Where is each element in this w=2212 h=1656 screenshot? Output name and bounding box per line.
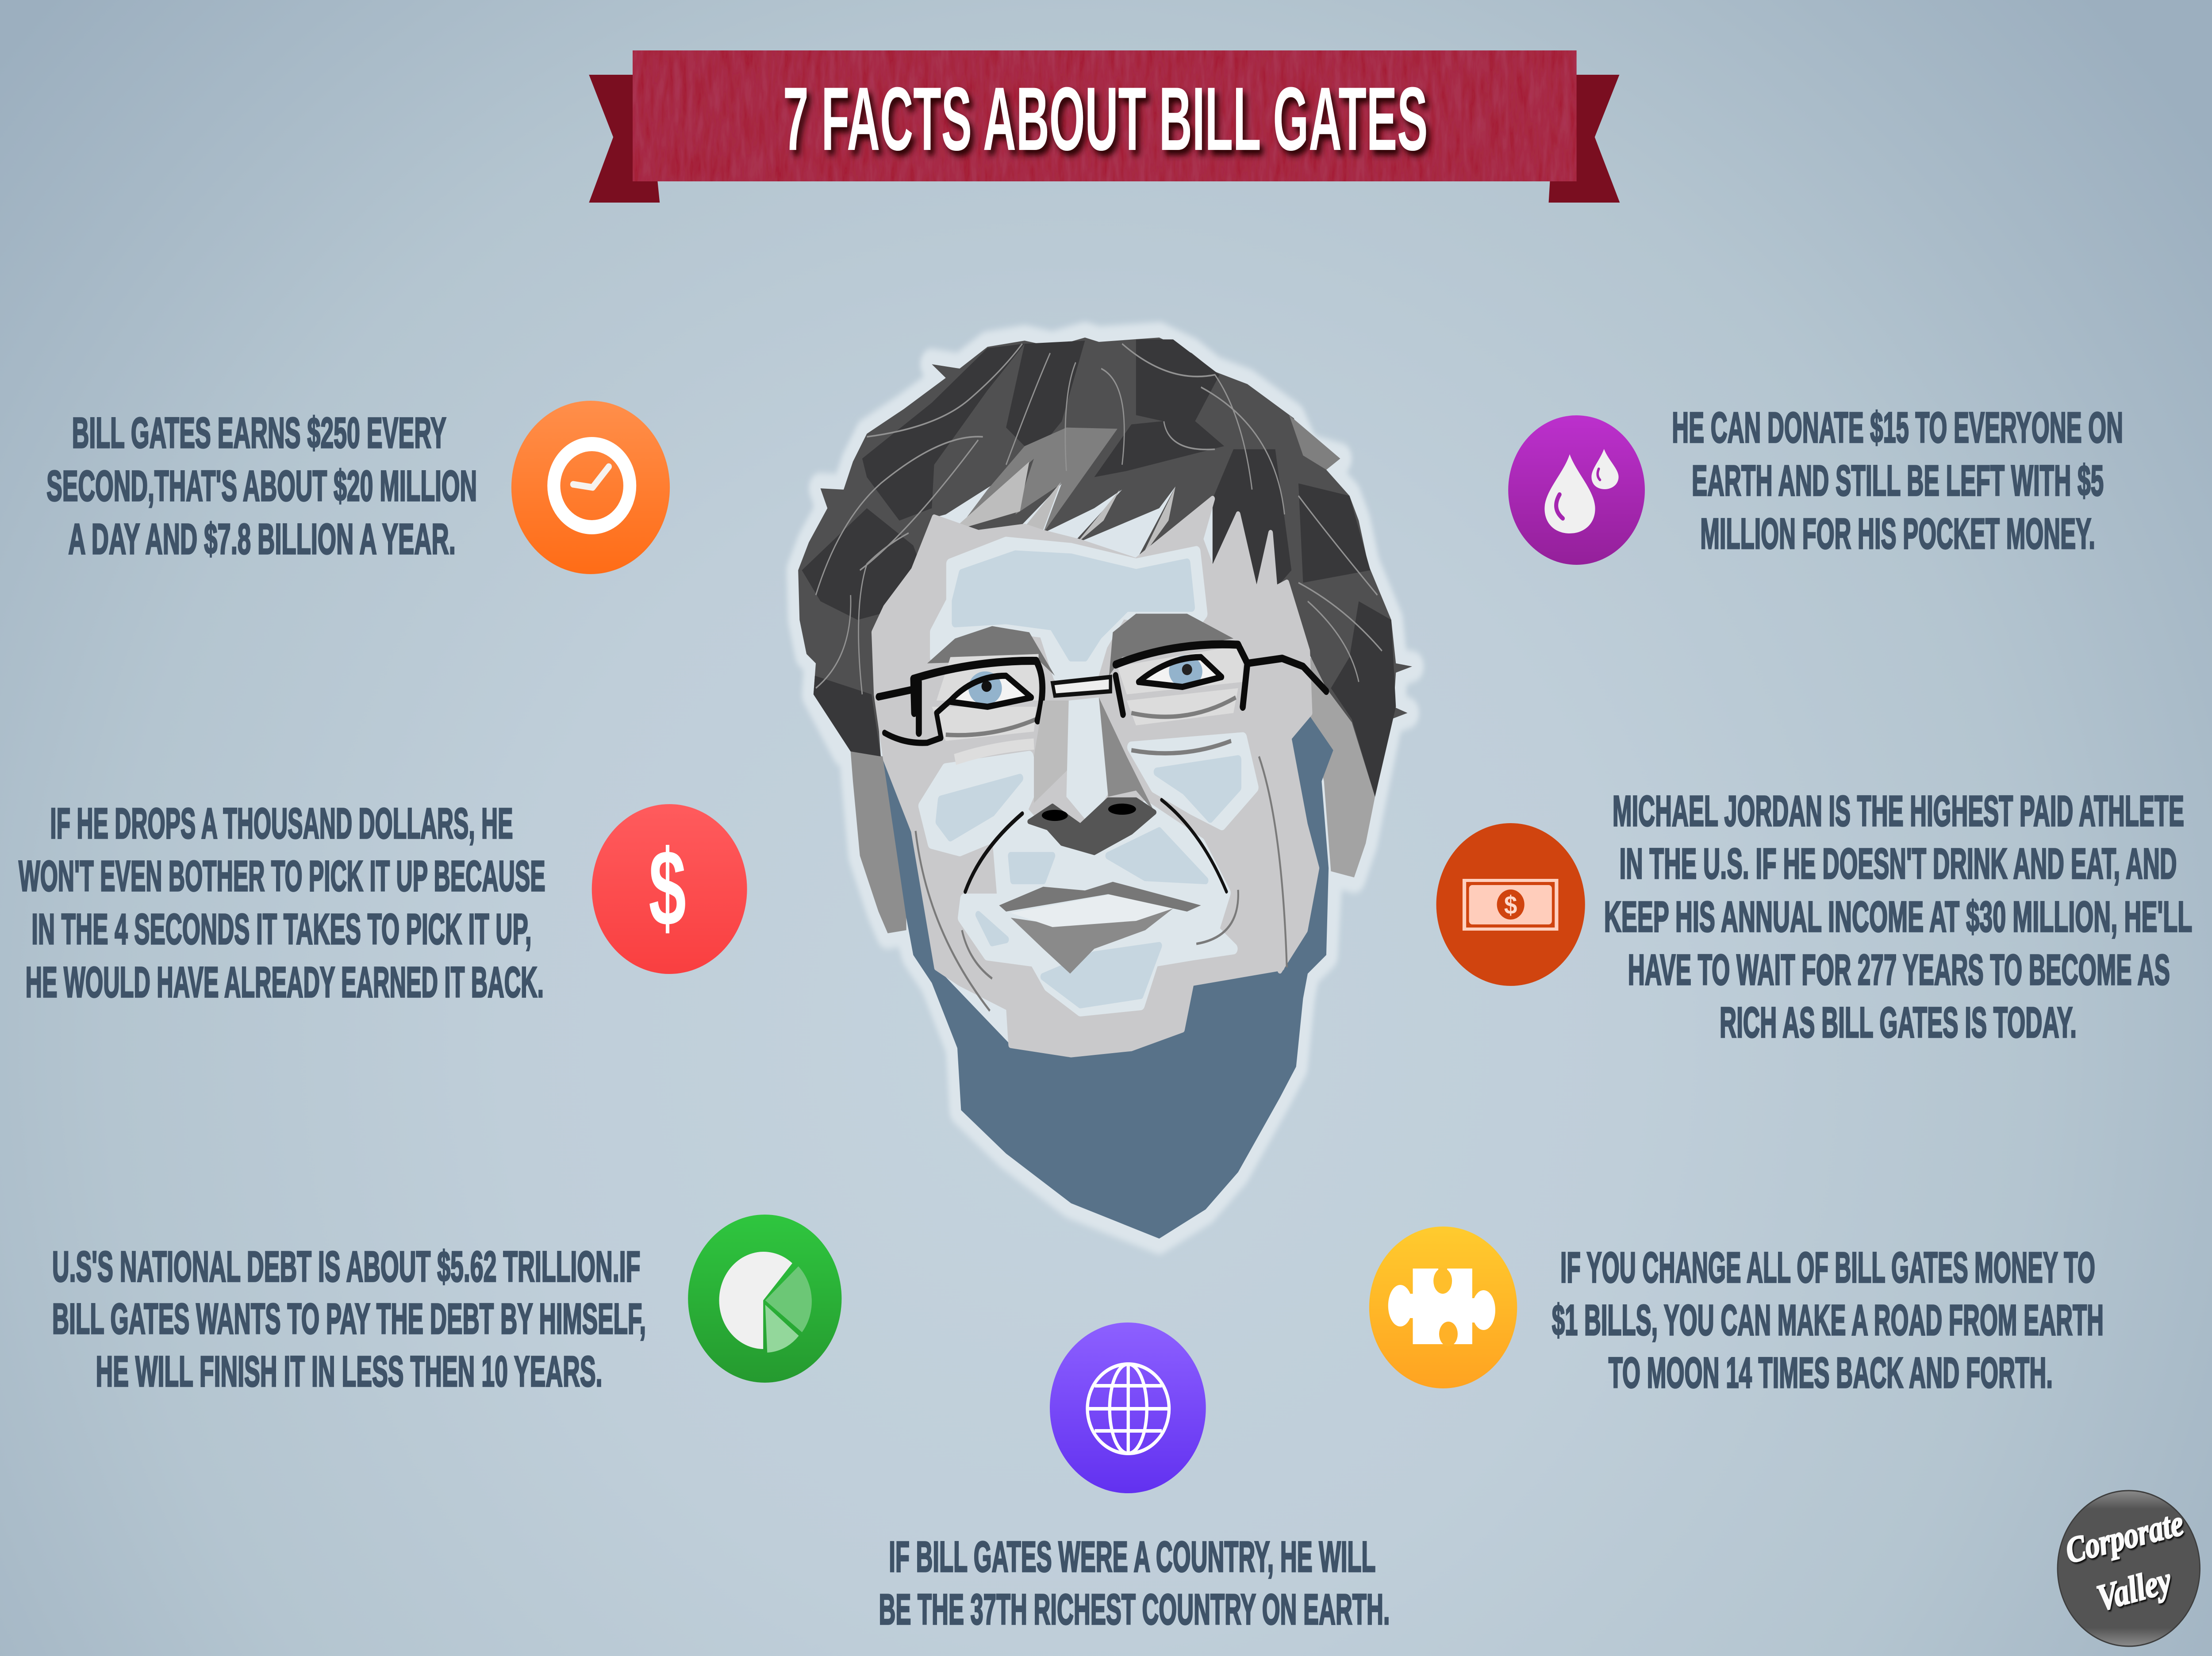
hair strands xyxy=(816,344,1382,694)
logo badge: Corporate Valley: Valley xyxy=(2093,1559,2175,1619)
portrait of Bill Gates xyxy=(798,337,1412,1238)
smile lines xyxy=(965,800,1226,892)
fact 1 text xyxy=(46,409,477,563)
icon: clock xyxy=(511,401,670,574)
fact 5 text xyxy=(1604,787,2192,1046)
mouth area shades xyxy=(978,831,1206,1004)
right cheek shade xyxy=(1157,759,1238,818)
banner main panel xyxy=(633,50,1577,181)
icon: dollar sign xyxy=(592,804,747,974)
mouth xyxy=(999,882,1201,974)
fact 3 text: HE WILL FINISH IT IN LESS THEN 10 YEARS. xyxy=(96,1347,602,1395)
nose xyxy=(1029,698,1155,853)
logo badge: Corporate Valley: Corporate xyxy=(2062,1502,2187,1571)
fact 2 text: IN THE 4 SECONDS IT TAKES TO PICK IT UP, xyxy=(31,905,532,953)
right ear xyxy=(1308,657,1375,878)
icon: globe xyxy=(1050,1322,1206,1493)
fact 3 text: BILL GATES WANTS TO PAY THE DEBT BY HIMSELF, xyxy=(52,1295,646,1343)
hair highlights xyxy=(950,462,1175,559)
fact 1 text: A DAY AND $7.8 BILLION A YEAR. xyxy=(68,515,456,563)
mouth area highlight xyxy=(962,806,1233,1011)
icon: dollar sign: $ xyxy=(649,828,686,949)
icon: dollar bill: $ xyxy=(1504,891,1517,920)
icon: dollar bill xyxy=(1436,823,1585,986)
glasses xyxy=(879,644,1326,743)
under-eye shadow xyxy=(946,698,1236,759)
fact 2 text: HE WOULD HAVE ALREADY EARNED IT BACK. xyxy=(26,958,544,1006)
jaw lines xyxy=(916,756,1287,1011)
brows xyxy=(927,613,1233,676)
logo badge: Corporate Valley xyxy=(2057,1490,2200,1647)
fact 7 text: BE THE 37TH RICHEST COUNTRY ON EARTH. xyxy=(879,1585,1390,1633)
title text: 7 FACTS ABOUT BILL GATES xyxy=(783,69,1428,169)
left ear xyxy=(851,751,906,933)
portrait halo xyxy=(798,337,1412,1238)
fact 3 text xyxy=(52,1242,646,1395)
icon: pie chart xyxy=(688,1215,841,1383)
fact 7 text xyxy=(879,1533,1390,1633)
right eye xyxy=(1138,655,1222,687)
hair base xyxy=(798,337,1412,797)
icon: puzzle piece xyxy=(1369,1227,1517,1388)
face skin xyxy=(874,499,1317,1054)
fact 1 text: BILL GATES EARNS $250 EVERY xyxy=(72,409,446,457)
title banner xyxy=(589,50,1620,203)
forehead shade xyxy=(955,555,1192,657)
fact 7 text: IF BILL GATES WERE A COUNTRY, HE WILL xyxy=(889,1533,1375,1581)
glasses bridge xyxy=(1052,677,1110,696)
icon: water drops xyxy=(1508,415,1645,565)
right cheek highlight xyxy=(1131,738,1254,824)
fact 2 text: WON'T EVEN BOTHER TO PICK IT UP BECAUSE xyxy=(19,852,545,900)
fact 3 text: U.S'S NATIONAL DEBT IS ABOUT $5.62 TRILLION.IF xyxy=(52,1242,640,1291)
banner ribbon tails xyxy=(589,75,1620,203)
fact 4 text xyxy=(1672,403,2123,558)
hair dark tones xyxy=(802,339,1396,797)
fact 2 text: IF HE DROPS A THOUSAND DOLLARS, HE xyxy=(50,799,513,847)
fact 6 text xyxy=(1552,1243,2104,1397)
fact 1 text: SECOND,THAT'S ABOUT $20 MILLION xyxy=(46,462,477,510)
left cheek highlight xyxy=(922,756,1036,851)
left cheek shade xyxy=(939,778,1020,837)
fact 2 text xyxy=(19,799,545,1006)
forehead highlight xyxy=(934,542,1203,676)
left eye xyxy=(950,671,1029,707)
under-eye areas xyxy=(932,645,1243,741)
beard xyxy=(883,713,1333,1238)
hair mid tones xyxy=(960,415,1340,533)
